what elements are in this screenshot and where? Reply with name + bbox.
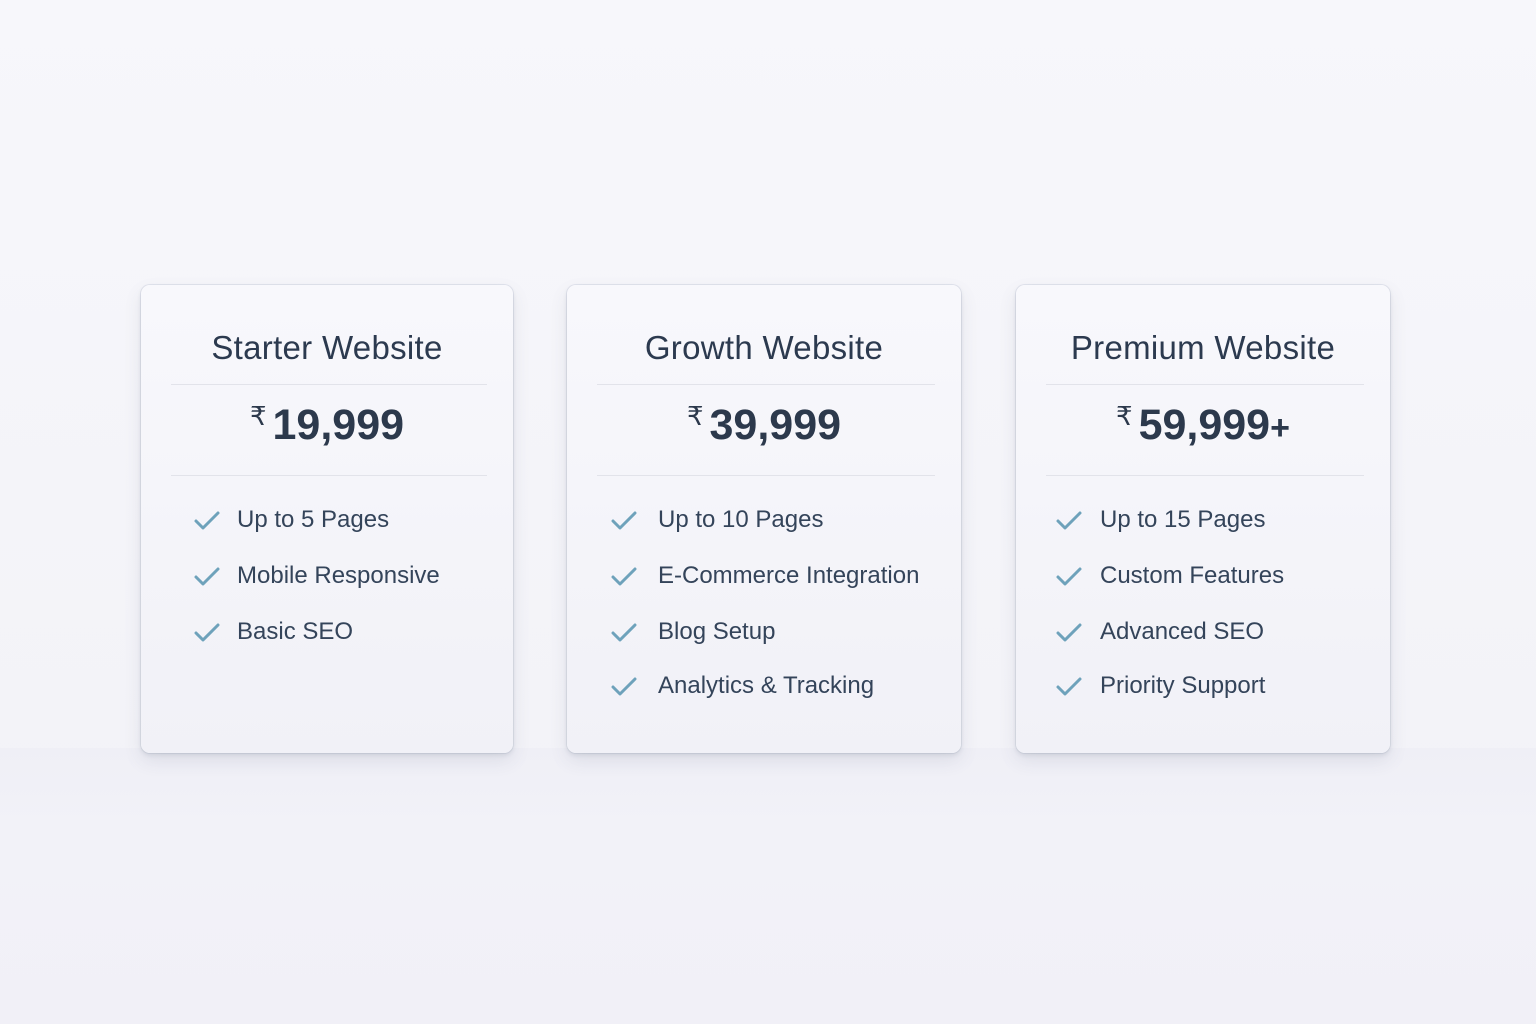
feature list: growth: Up to 10 Pages (658, 506, 823, 533)
feature list: premium: Priority Support (1100, 672, 1265, 699)
card: premium (1016, 285, 1390, 753)
heading: growth: Growth Website (645, 329, 883, 366)
card: starter (141, 285, 513, 753)
price: premium: ₹59,999+ (1116, 401, 1290, 449)
feature list: premium: Advanced SEO (1100, 618, 1264, 645)
feature list: premium: Custom Features (1100, 562, 1284, 589)
heading: starter: Starter Website (211, 329, 443, 366)
feature list: starter: Up to 5 Pages (237, 506, 389, 533)
feature list: growth: Analytics & Tracking (658, 672, 874, 699)
heading: premium: Premium Website (1071, 329, 1335, 366)
feature list: starter: Mobile Responsive (237, 562, 440, 589)
feature list: premium: Up to 15 Pages (1100, 506, 1265, 533)
price: growth: ₹39,999 (687, 401, 841, 449)
feature list: growth: Blog Setup (658, 618, 775, 645)
feature list: growth: E-Commerce Integration (658, 562, 919, 589)
feature list: growth (611, 506, 919, 699)
feature list: starter: Basic SEO (237, 618, 353, 645)
price: starter: ₹19,999 (250, 401, 404, 449)
feature list: premium (1056, 506, 1284, 699)
card: growth (567, 285, 961, 753)
feature list: starter (194, 506, 440, 645)
